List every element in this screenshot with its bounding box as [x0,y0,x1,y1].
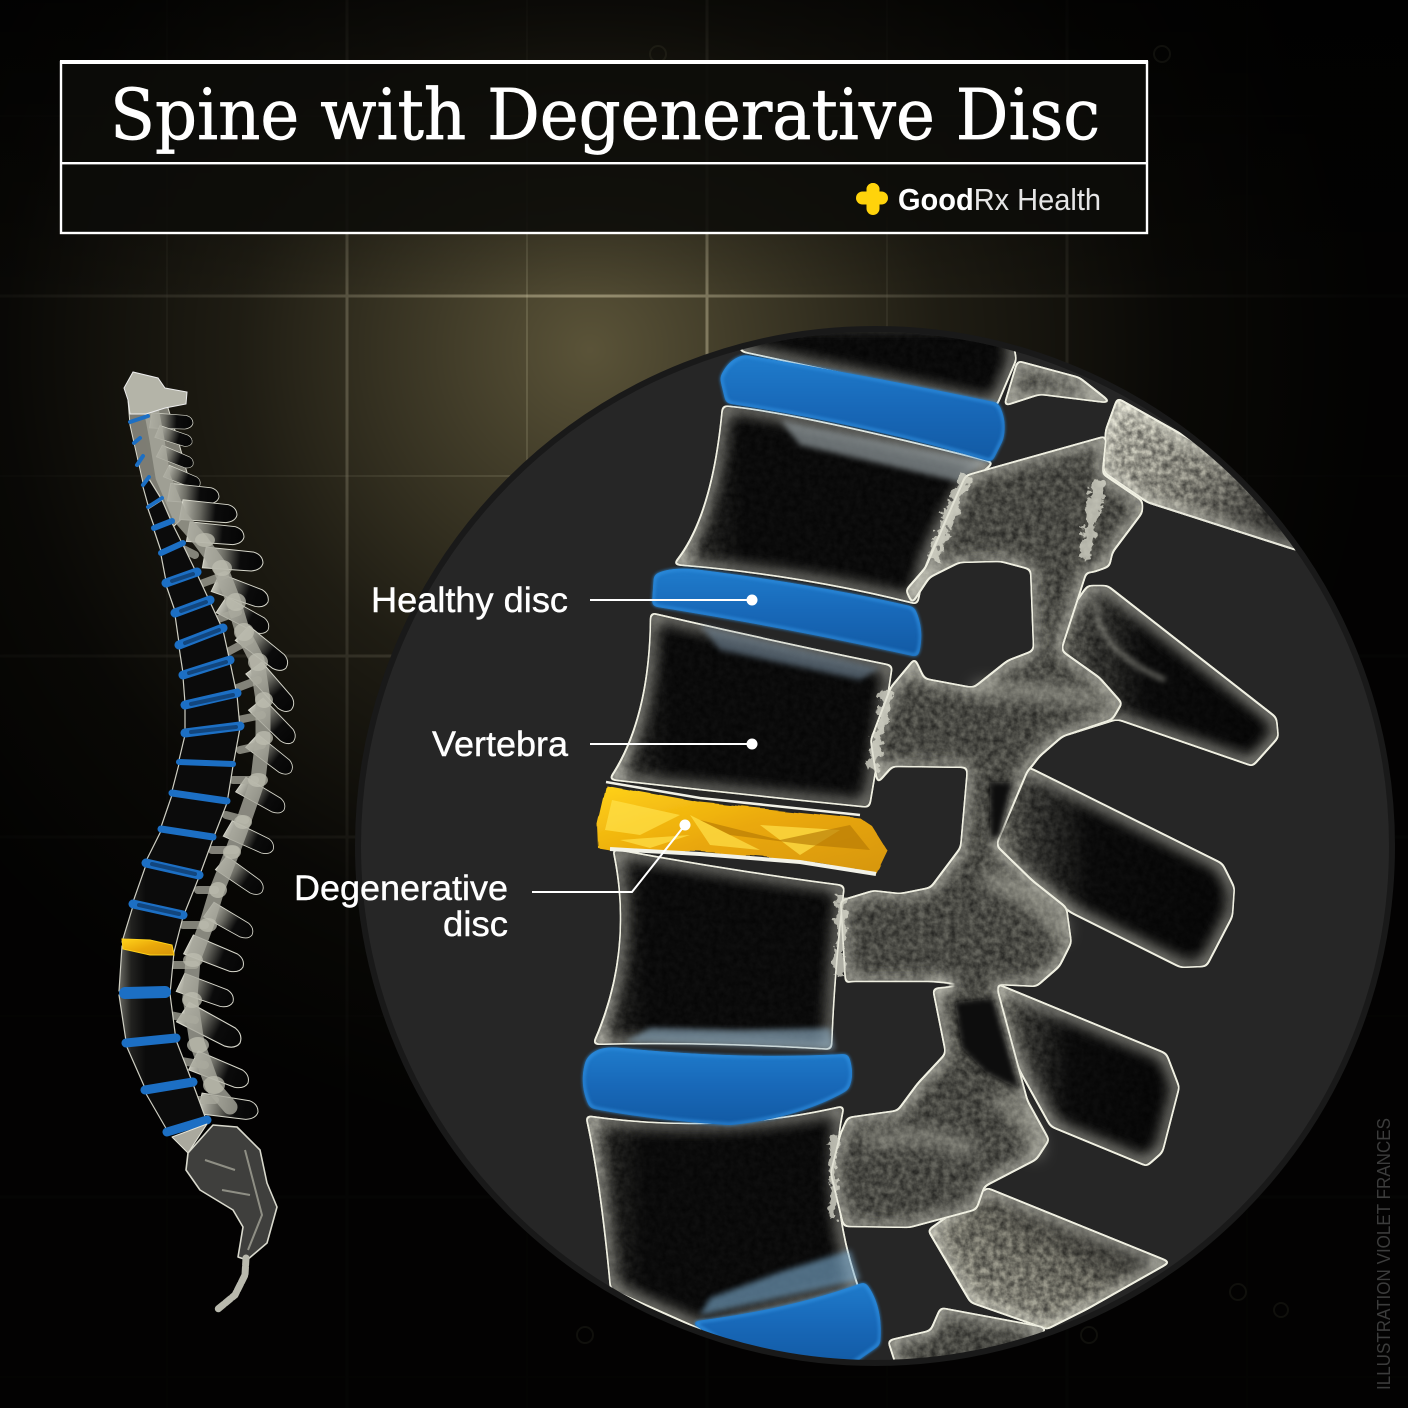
title box [60,60,1148,233]
callout: healthy disc [371,581,758,620]
dark slots in columns [955,782,1020,1090]
top strut [1004,361,1108,406]
degenerative disc, small spine [122,939,174,955]
spinous processes, large [985,585,1279,1167]
articular column and pedicles [150,403,263,1107]
cervical bone mass [128,396,196,528]
callout: vertebra: Vertebra [432,725,569,764]
disc inner shading [139,574,236,914]
bone: posterior elements [830,360,1143,1380]
callout: degenerative disc: disc [443,905,508,944]
lower lamina [887,1307,1047,1380]
vertebral bodies [119,479,240,1130]
pointed process tip [1150,503,1290,548]
magnified circle lens [358,320,1392,1380]
vertebra 2 [608,612,893,808]
degenerative disc, large [597,782,887,874]
vertebra 1 [672,405,995,605]
spinous processes [149,413,300,1122]
blue-grey surface sheen on vertebrae [625,420,985,1315]
callout: healthy disc: Healthy disc [371,581,568,620]
sacrum [172,1124,277,1260]
coccyx [218,1258,246,1309]
GoodRx Health logo: GoodRx Health [898,182,1101,217]
lower spinous process [927,1187,1172,1330]
illustration credit: ILLUSTRATION VIOLET FRANCES [1374,1118,1394,1390]
healthy discs, large [583,355,1005,1366]
pedicle 1 [905,435,1143,605]
top-right process [1103,397,1300,552]
upper vertebra remnant [740,332,1017,404]
callout: degenerative disc [294,820,690,944]
pedicle 4 and column [830,985,1050,1228]
vertebra 3 [592,848,845,1050]
vertebra 4 [585,1105,860,1330]
facet joints [182,533,273,1094]
icon: yellow plus [856,183,888,215]
callout: vertebra [432,725,758,764]
inner highlight arc of spinous process [1096,600,1165,680]
callout: degenerative disc: Degenerative [294,869,508,908]
rough bright junction strips [832,475,1100,1218]
soft cream ridges on bone [870,690,1100,1150]
vertebra bodies [585,320,1017,1330]
skull-side cervical top [124,372,187,414]
small full spine illustration [119,372,300,1309]
pedicle 2 and column [870,570,1123,785]
title: Spine with Degenerative Disc [110,74,1100,156]
healthy discs, small spine [125,416,240,1132]
pedicle 3 and column [840,767,1072,987]
